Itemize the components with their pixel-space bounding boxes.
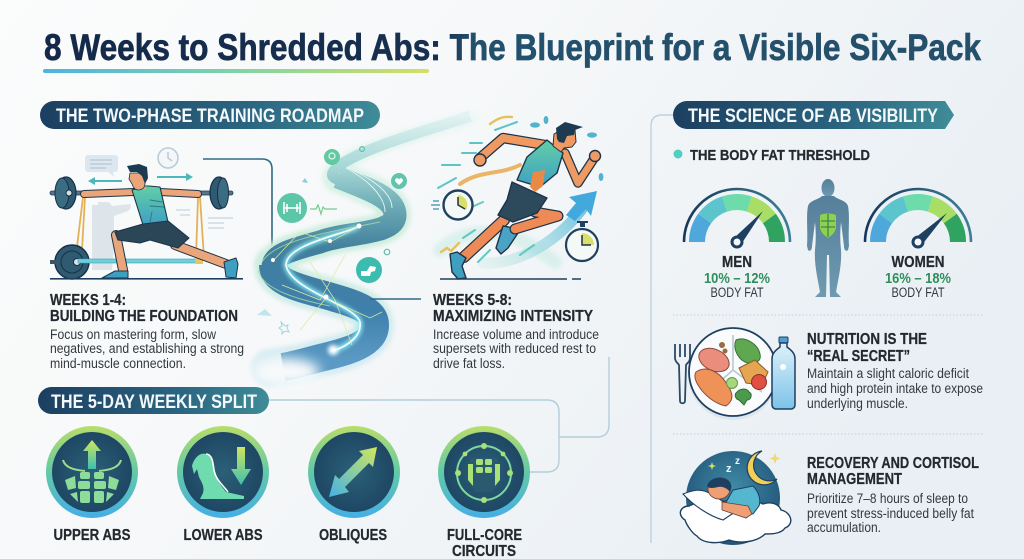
text: recovery: Prioritize 7–8 hours of sleep to — [807, 491, 968, 506]
icon: upper abs — [46, 426, 138, 518]
icon: stopwatch — [566, 221, 598, 261]
text: women: BODY FAT — [892, 285, 944, 300]
icon: small bubbles — [324, 147, 407, 255]
text: recovery: RECOVERY AND CORTISOL — [807, 455, 979, 472]
moon — [747, 451, 777, 485]
gauge: men — [684, 189, 790, 247]
plate — [688, 328, 778, 420]
labels: weekly split: UPPER ABS — [54, 527, 131, 544]
cloud and pillow — [680, 500, 791, 543]
resistance bands — [77, 197, 204, 258]
text: nutrition: underlying muscle. — [807, 396, 908, 411]
icon: lower abs — [177, 426, 269, 518]
icon: sleeping person on cloud: z — [735, 456, 740, 467]
text: men — [704, 254, 770, 300]
text: men: MEN — [722, 254, 752, 271]
figure: body with highlighted abs — [807, 179, 849, 297]
athlete — [450, 122, 600, 279]
labels: weekly split: FULL-CORE — [447, 527, 522, 544]
text: weeks 5-8: supersets with reduced rest to — [433, 341, 596, 356]
text: weeks 5-8: Increase volume and introduce — [433, 327, 599, 342]
road halo — [270, 118, 470, 368]
text: weeks 5-8: MAXIMIZING INTENSITY — [433, 308, 593, 325]
text: weeks 1-4 — [50, 292, 244, 371]
ground line — [50, 278, 243, 280]
clock — [158, 148, 178, 168]
ground line — [440, 278, 581, 280]
text: nutrition: NUTRITION IS THE — [807, 331, 927, 348]
icon: dumbbell bubble — [277, 193, 337, 223]
connector: road to weeks 5-8 — [370, 298, 421, 300]
text: weeks 1-4: negatives, and establishing a strong — [50, 341, 244, 356]
text: weeks 1-4: mind-muscle connection. — [50, 356, 186, 371]
illustration: sprinter — [431, 116, 603, 279]
icon: obliques — [308, 426, 400, 518]
sweat drops — [530, 116, 603, 181]
illustration: lifter lunge with barbell — [50, 148, 243, 280]
text: weeks 1-4: Focus on mastering form, slow — [50, 327, 216, 342]
sleeper — [725, 486, 760, 514]
text: weeks 5-8 — [433, 292, 599, 371]
fade of road end — [252, 358, 320, 386]
fork — [675, 344, 690, 403]
text: weeks 5-8: WEEKS 5-8: — [433, 292, 512, 309]
barbell — [50, 177, 233, 209]
labels: weekly split — [54, 527, 522, 559]
connector: weekly split to roadmap — [269, 357, 609, 472]
text: recovery — [807, 455, 979, 535]
subheading: body fat threshold: THE BODY FAT THRESHOLD — [690, 147, 870, 164]
ghost silhouette — [92, 202, 131, 270]
icon: full-core circuits — [438, 426, 530, 518]
text: men: BODY FAT — [710, 285, 764, 300]
heading: science of ab visibility — [673, 101, 954, 129]
illustration: winding road — [252, 116, 470, 386]
road surface — [273, 116, 470, 367]
text: women: WOMEN — [892, 254, 944, 271]
bottle — [772, 337, 795, 409]
labels: weekly split: OBLIQUES — [319, 527, 387, 544]
direction arrows — [88, 173, 193, 185]
text: nutrition — [807, 331, 983, 411]
heading: two-phase roadmap: THE TWO-PHASE TRAINING ROADMAP — [56, 106, 364, 127]
text: nutrition: Maintain a slight caloric deficit — [807, 366, 969, 381]
icon: muscle bubble — [356, 257, 382, 283]
chat bubble — [85, 155, 118, 177]
labels: weekly split: LOWER ABS — [184, 527, 263, 544]
text: women: 16% – 18% — [885, 270, 951, 287]
heading: weekly split — [38, 387, 269, 414]
heading: two-phase roadmap — [40, 101, 380, 129]
text: weeks 1-4: BUILDING THE FOUNDATION — [50, 308, 238, 325]
motion swooshes — [438, 117, 585, 263]
gauge: women — [865, 189, 971, 247]
text: recovery: accumulation. — [807, 520, 881, 535]
text: women — [885, 254, 951, 300]
icon: sleeping person on cloud — [680, 451, 791, 545]
text: nutrition: “REAL SECRET” — [807, 348, 910, 365]
text: weeks 1-4: WEEKS 1-4: — [50, 292, 126, 309]
connector: science panel rail — [651, 115, 673, 543]
heading: science of ab visibility: THE SCIENCE OF AB VISIBILITY — [688, 106, 938, 127]
text: recovery: prevent stress-induced belly fat — [807, 506, 974, 521]
growth arrow — [566, 191, 597, 221]
text: weeks 5-8: drive fat loss. — [433, 356, 505, 371]
text: nutrition: and high protein intake to expose — [807, 381, 983, 396]
icon: fork, plate and bottle — [675, 328, 795, 420]
text: recovery: MANAGEMENT — [807, 471, 902, 488]
athlete — [84, 164, 238, 278]
text: men: 10% – 12% — [704, 270, 770, 287]
icon: clock — [431, 190, 472, 220]
icon: sleeping person on cloud: z — [726, 463, 732, 475]
heading: weekly split: THE 5-DAY WEEKLY SPLIT — [51, 392, 257, 413]
floor plate and band — [50, 245, 203, 279]
light trails — [286, 227, 360, 351]
connector: weeks 1-4 to road — [203, 159, 272, 259]
